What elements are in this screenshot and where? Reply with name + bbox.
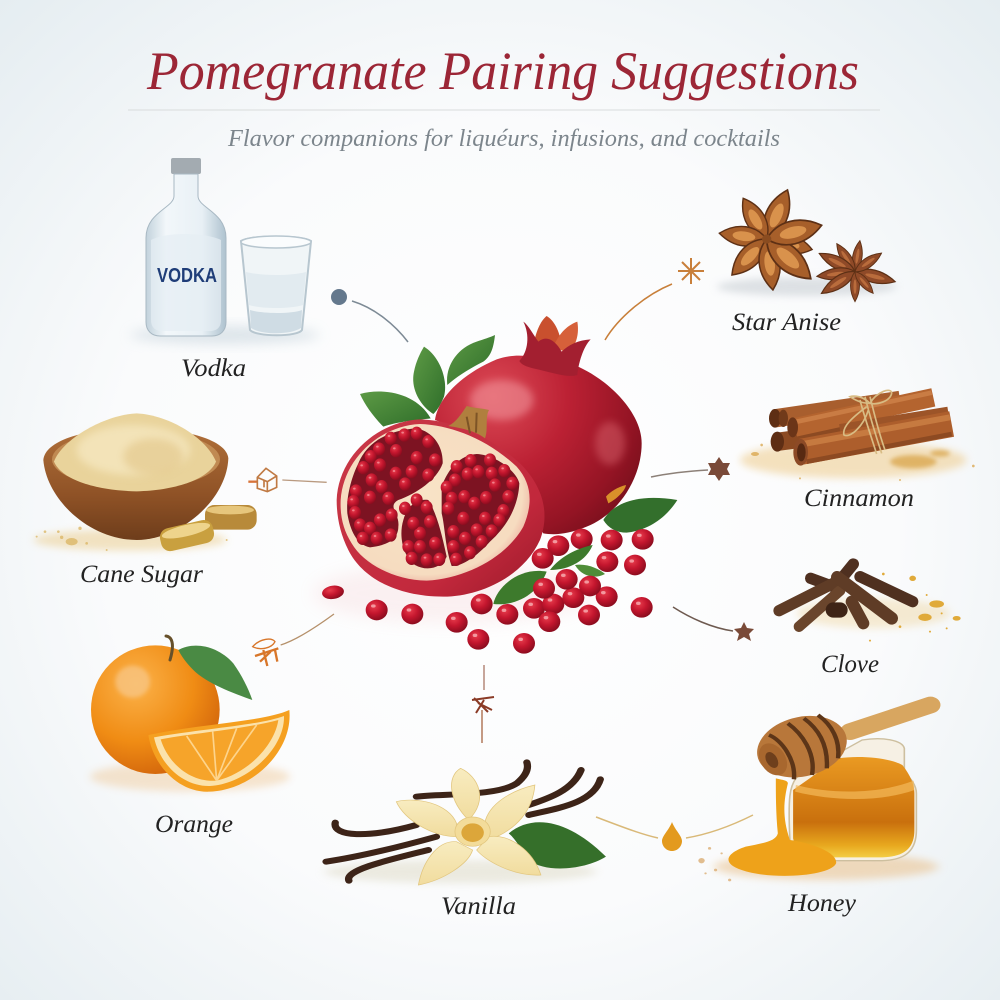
label: vanilla: Vanilla xyxy=(441,893,516,920)
leaf xyxy=(178,646,252,700)
crown front xyxy=(519,322,591,376)
label: honey: Honey xyxy=(787,890,857,917)
icon: vodka bottle: VODKA xyxy=(157,265,217,287)
cut pomegranate half xyxy=(337,406,544,597)
spilled sugar xyxy=(36,527,228,551)
clove item xyxy=(779,564,961,642)
loose seeds behind leaves xyxy=(532,529,654,575)
icon: large star anise xyxy=(718,186,824,291)
sugar mound xyxy=(54,413,216,491)
vodka item xyxy=(130,158,320,382)
central pomegranate illustration xyxy=(313,316,677,654)
icon: twine bow xyxy=(844,390,892,454)
icon: orange fruit xyxy=(91,645,220,774)
loose seeds xyxy=(321,569,653,654)
vanilla item xyxy=(324,762,606,885)
seed chambers xyxy=(347,428,519,568)
connector: honey xyxy=(596,815,753,851)
label: star anise: Star Anise xyxy=(732,309,841,336)
icon: wooden bowl xyxy=(43,428,228,540)
vanilla pods xyxy=(326,762,600,881)
leaves behind the fruit xyxy=(360,335,495,427)
connector: vanilla xyxy=(472,665,494,743)
spilled cinnamon powder xyxy=(751,444,975,481)
title: Pomegranate Pairing Suggestions xyxy=(146,41,859,101)
connector: orange xyxy=(253,614,334,666)
icon: clove sticks xyxy=(779,564,913,627)
seeds right chamber xyxy=(441,453,518,566)
label: cinnamon: Cinnamon xyxy=(804,485,914,512)
star anise item xyxy=(717,186,897,302)
connector: star anise xyxy=(605,258,704,340)
orange slice xyxy=(148,710,290,792)
leaf lower right xyxy=(603,498,677,533)
label: vodka: Vodka xyxy=(181,355,246,382)
icon: honey dipper xyxy=(746,705,930,788)
icon: small star anise xyxy=(816,240,897,302)
connector: vodka xyxy=(331,289,408,342)
leaf xyxy=(509,822,606,868)
label: cane sugar: Cane Sugar xyxy=(80,561,203,588)
connector: cinnamon xyxy=(651,457,730,481)
honey item xyxy=(698,705,938,881)
stem xyxy=(166,636,172,660)
honey drip and pool xyxy=(728,778,836,876)
icon: cinnamon sticks xyxy=(769,393,952,466)
whole pomegranate xyxy=(435,356,642,534)
connector: clove xyxy=(673,607,754,641)
cane sugar item xyxy=(33,413,257,553)
icon: honey jar xyxy=(789,739,916,861)
label: orange: Orange xyxy=(155,811,233,838)
highlight on orange xyxy=(115,666,150,698)
sugar cane slices xyxy=(158,505,257,553)
vanilla flower xyxy=(396,768,541,885)
icon: shot glass xyxy=(241,236,311,335)
label: clove: Clove xyxy=(821,651,879,678)
small leaves among seeds xyxy=(493,545,605,604)
subtitle: Flavor companions for liquéurs, infusions, and cocktails xyxy=(227,126,780,152)
cinnamon item xyxy=(740,390,975,481)
connector: cane sugar xyxy=(248,468,327,492)
spilled spice xyxy=(869,573,961,642)
icon: vodka bottle xyxy=(146,158,226,336)
orange item xyxy=(90,636,290,792)
seeds left chamber xyxy=(347,427,445,567)
crown back spikes xyxy=(533,316,578,353)
spice specks xyxy=(698,847,731,881)
